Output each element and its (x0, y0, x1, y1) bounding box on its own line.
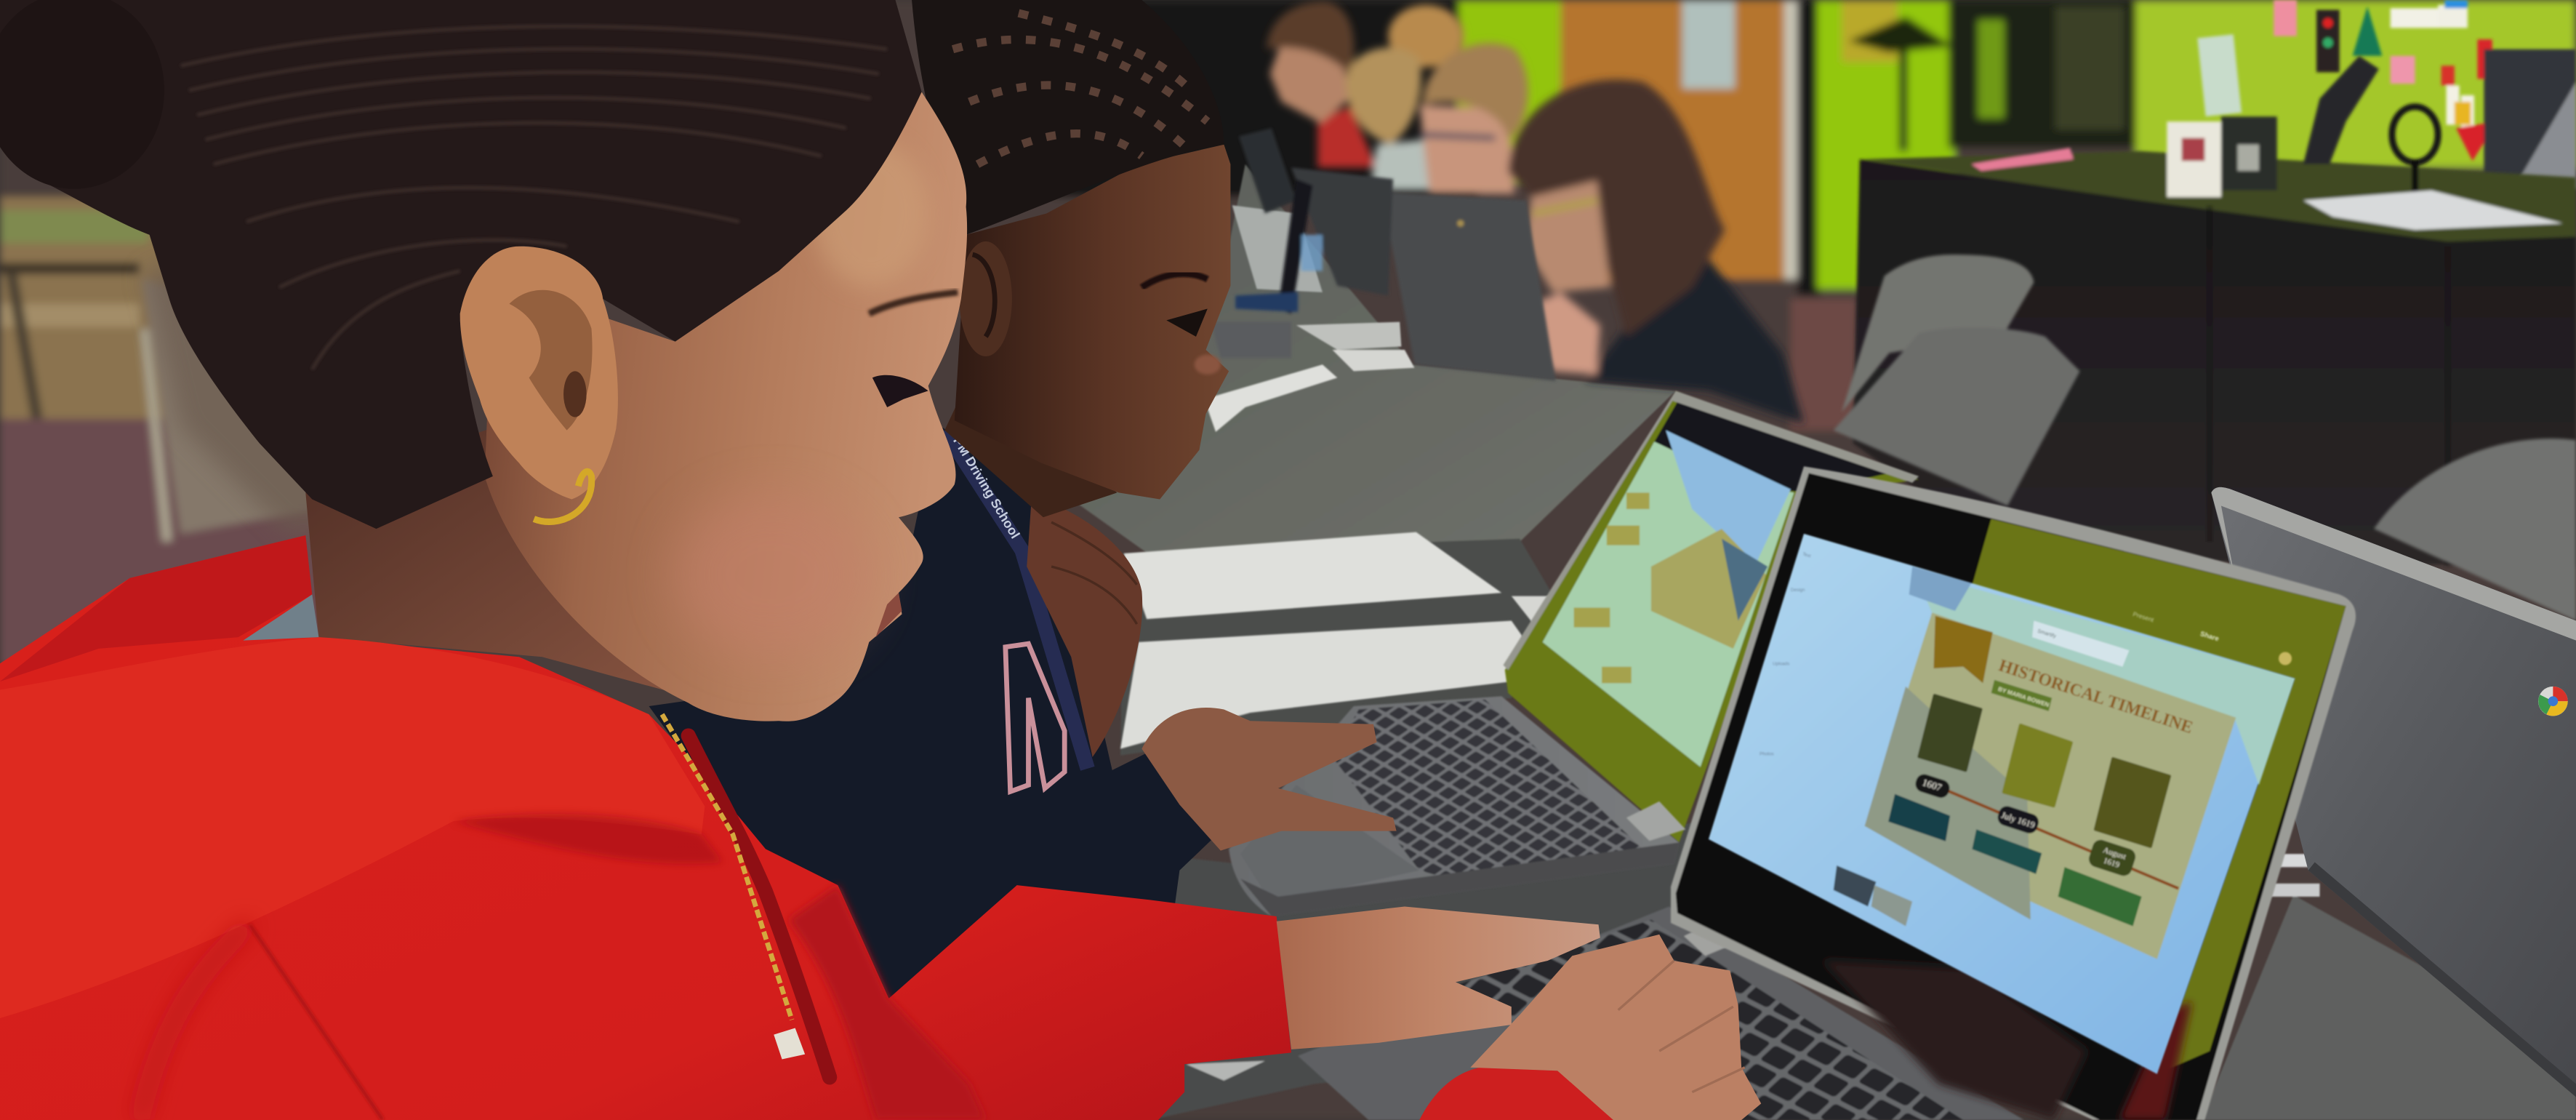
chair: right (2374, 439, 2576, 621)
side panel labels: Design (1791, 588, 1805, 593)
eyebrow (869, 292, 958, 313)
hair bun (0, 0, 164, 189)
forehead sheen (813, 140, 928, 287)
slide thumbnails (1834, 865, 1912, 927)
navy hoodie (649, 424, 1217, 1005)
girl in navy hoodie (649, 0, 1397, 1005)
date pill 1607: 1607 (1921, 777, 1943, 793)
ear (960, 241, 1012, 356)
student: orange hair behind (1388, 5, 1464, 68)
date pill August 1619: 1619 (2102, 857, 2121, 870)
front laptop base and keyboard (1298, 906, 2024, 1120)
timeline line (1932, 784, 2178, 889)
eye (1166, 309, 1208, 337)
sleeve cuff (1419, 1068, 1613, 1120)
lips (875, 593, 902, 637)
seam (249, 924, 382, 1120)
pegboard items on back wall (2197, 0, 2576, 189)
side panel labels: Uploads (1773, 662, 1789, 667)
student: girl with glasses and long hair (1508, 79, 1804, 424)
timeline photo 2 (2004, 725, 2071, 806)
side panel labels: Photos (1760, 752, 1774, 757)
laptop: front student (1298, 466, 2356, 1120)
side panel labels: Text (1802, 551, 1812, 559)
profile avatar (2279, 652, 2292, 665)
chairs (1834, 255, 2576, 621)
icon: chrome logo (2538, 687, 2568, 716)
cheek blush (673, 492, 871, 657)
front laptop screen (1709, 534, 2295, 1074)
event boxes (1888, 794, 1950, 841)
date pill July 1619: July 1619 (2000, 810, 2037, 831)
slide author label (1991, 680, 2052, 711)
black desk with green reflective top (1853, 56, 2576, 567)
lanyard (944, 431, 1088, 769)
student: boy in red shirt (1267, 1, 1377, 167)
raised hand fingers highlight (1051, 522, 1137, 624)
eyelashes (872, 375, 928, 407)
background students (1267, 1, 1804, 424)
finger separators (1618, 961, 1745, 1092)
braided hair (912, 0, 1224, 235)
timeline photo 3 (2095, 759, 2170, 847)
hair (0, 0, 922, 529)
girl in red hoodie (0, 0, 1761, 1120)
right hand on keyboard (1277, 906, 1600, 1049)
editor toolbar: Present (2132, 610, 2155, 624)
middle laptop screen (1504, 391, 1919, 842)
date pill 1607 (1914, 772, 1951, 800)
date pill July 1619 (1996, 804, 2041, 836)
laptop: middle student (1229, 391, 1919, 916)
editor toolbar: Smartify (2037, 628, 2058, 639)
ear (460, 247, 618, 499)
face (955, 145, 1230, 499)
slide: historical timeline (1865, 612, 2236, 959)
red hoodie (0, 535, 1291, 1120)
front laptop lid (1671, 466, 2356, 1120)
face (485, 92, 967, 721)
timeline photo 1 (1919, 695, 1981, 770)
neck (944, 377, 1118, 517)
hood fold shadow (454, 814, 723, 864)
hood front highlight (0, 637, 705, 1018)
left hand on keyboard (1470, 935, 1761, 1120)
earring (534, 471, 592, 521)
hood back shadow (0, 535, 312, 681)
middle laptop base and keyboard (1229, 696, 1685, 916)
slide title: HISTORICAL TIMELINE (1997, 656, 2195, 737)
papers on table (1120, 205, 1554, 749)
chair: far (1842, 255, 2034, 412)
chair: middle (1834, 327, 2080, 505)
reflection of hands at screen bottom (1823, 961, 2087, 1120)
date pill August 1619: August (2102, 846, 2127, 862)
editor toolbar (2032, 610, 2220, 667)
editor toolbar: Share (2199, 630, 2220, 643)
eyebrow (1141, 273, 1208, 287)
side panel labels (1760, 551, 1812, 757)
frizzy hair wisps behind (143, 247, 369, 534)
nose highlight (1195, 355, 1221, 375)
background laptops (1211, 128, 1556, 381)
student: blonde child (1346, 47, 1432, 191)
keyboard hand (1141, 708, 1397, 851)
date pill August 1619 (2087, 838, 2138, 878)
lanyard: PM Driving School (950, 434, 1022, 541)
student: boy with glasses (1419, 43, 1528, 193)
olive glare on bezel (1971, 519, 2346, 1018)
necklace and drawstring (662, 714, 830, 1077)
neck (305, 411, 723, 706)
conference table (1042, 164, 2576, 1120)
slide banner (1934, 616, 1993, 683)
hoodie letter N (1006, 644, 1064, 791)
raised hand (1027, 496, 1142, 757)
slide author label: BY MARIA BOWEN (1997, 686, 2050, 708)
laptop: far right closed lid (2211, 487, 2576, 1097)
lower hoodie right shadow (789, 885, 986, 1120)
